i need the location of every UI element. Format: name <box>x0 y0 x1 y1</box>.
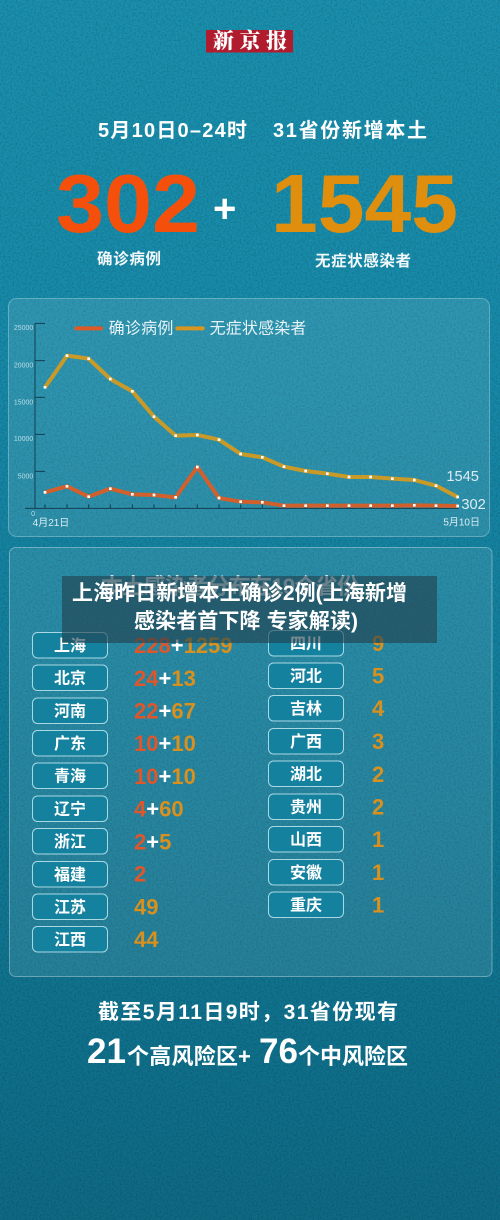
axis date labels and end values: 302 <box>461 497 486 513</box>
right column of provinces: 贵州 <box>290 798 322 816</box>
left column of provinces: 228+1259 <box>134 633 233 658</box>
overlay headline banner: 感染者首下降 专家解读) <box>134 609 358 633</box>
panel: trend chart <box>8 298 490 536</box>
left column of provinces: 江苏 <box>54 898 86 916</box>
right column of provinces: 安徽 <box>290 864 322 882</box>
left column of provinces: 49 <box>134 894 158 920</box>
left column of provinces: 浙江 <box>54 833 86 851</box>
line chart: 10000 <box>14 436 33 443</box>
line chart: 5000 <box>18 473 33 480</box>
legend: 无症状感染者 <box>210 319 306 337</box>
right column of provinces: 1 <box>372 827 384 852</box>
left column of provinces: 2+5 <box>134 830 171 854</box>
right column of provinces: 3 <box>372 729 384 754</box>
axis date labels and end values: 1545 <box>446 469 479 485</box>
axis date labels and end values: 4月21日 <box>33 517 69 529</box>
right column of provinces: 5 <box>372 664 384 688</box>
left column of provinces <box>32 632 233 952</box>
number captions <box>97 249 411 270</box>
line chart: 25000 <box>14 325 33 332</box>
right column of provinces: 1 <box>372 860 384 885</box>
axis date labels and end values <box>33 469 486 529</box>
risk area summary: 个中风险区 <box>298 1044 408 1069</box>
left column of provinces: 北京 <box>54 668 86 688</box>
right column of provinces: 4 <box>372 696 385 721</box>
right column of provinces: 2 <box>372 762 384 787</box>
line chart: 0 <box>31 511 35 518</box>
right column of provinces: 河北 <box>290 668 322 686</box>
right column of provinces: 2 <box>372 794 384 820</box>
right column of provinces: 重庆 <box>290 896 322 914</box>
logo: 新京报: 新京报 <box>213 25 287 55</box>
left column of provinces: 江西 <box>54 931 86 949</box>
right column of provinces: 湖北 <box>290 766 322 784</box>
right column of provinces: 四川 <box>290 636 322 653</box>
left column of provinces: 青海 <box>54 768 86 786</box>
risk area summary: + <box>238 1044 251 1069</box>
headline numbers: 1545 <box>271 157 458 250</box>
overlay headline banner <box>62 576 437 643</box>
headline numbers: 302 <box>56 157 200 250</box>
line chart: 15000 <box>14 399 33 406</box>
left column of provinces: 上海 <box>54 637 86 655</box>
risk area summary: 21 <box>87 1032 126 1071</box>
right column of provinces: 9 <box>372 631 384 656</box>
right column of provinces: 山西 <box>290 831 322 849</box>
left column of provinces: 44 <box>134 927 159 952</box>
line chart <box>14 319 486 529</box>
left column of provinces: 福建 <box>54 866 86 884</box>
number captions: 无症状感染者 <box>315 251 411 270</box>
risk area summary: 截至5月11日9时，31省份现有 <box>98 1001 398 1024</box>
risk area summary <box>87 1001 408 1071</box>
right column of provinces: 广西 <box>290 733 322 751</box>
left column of provinces: 4+60 <box>134 796 184 822</box>
left column of provinces: 辽宁 <box>54 800 86 818</box>
headline numbers: + <box>213 187 236 231</box>
right column of provinces <box>268 630 385 918</box>
headline numbers <box>56 157 458 250</box>
left column of provinces: 广东 <box>54 734 86 753</box>
left column of provinces: 10+10 <box>134 731 196 756</box>
heading: date and scope: 5月10日0–24时 <box>98 119 247 142</box>
legend: 确诊病例 <box>109 319 173 337</box>
left column of provinces: 24+13 <box>134 666 196 691</box>
panel: provincial distribution <box>10 548 492 976</box>
risk area summary: 76 <box>259 1032 298 1071</box>
right column of provinces: 1 <box>372 892 384 918</box>
risk area summary: 个高风险区 <box>127 1044 238 1069</box>
left column of provinces: 10+10 <box>134 764 196 789</box>
heading: date and scope: 31省份新增本土 <box>273 119 427 142</box>
panel heading: 本土感染者分布在19个省份 <box>101 574 359 599</box>
right column of provinces: 吉林 <box>290 700 322 718</box>
heading: date and scope <box>98 119 427 142</box>
overlay headline banner: 上海昨日新增本土确诊2例(上海新增 <box>72 581 407 605</box>
number captions: 确诊病例 <box>97 249 161 268</box>
axis date labels and end values: 5月10日 <box>443 516 480 528</box>
left column of provinces: 22+67 <box>134 698 196 724</box>
line chart: 20000 <box>14 362 33 369</box>
legend <box>76 319 306 337</box>
left column of provinces: 河南 <box>54 702 86 720</box>
left column of provinces: 2 <box>134 862 146 886</box>
